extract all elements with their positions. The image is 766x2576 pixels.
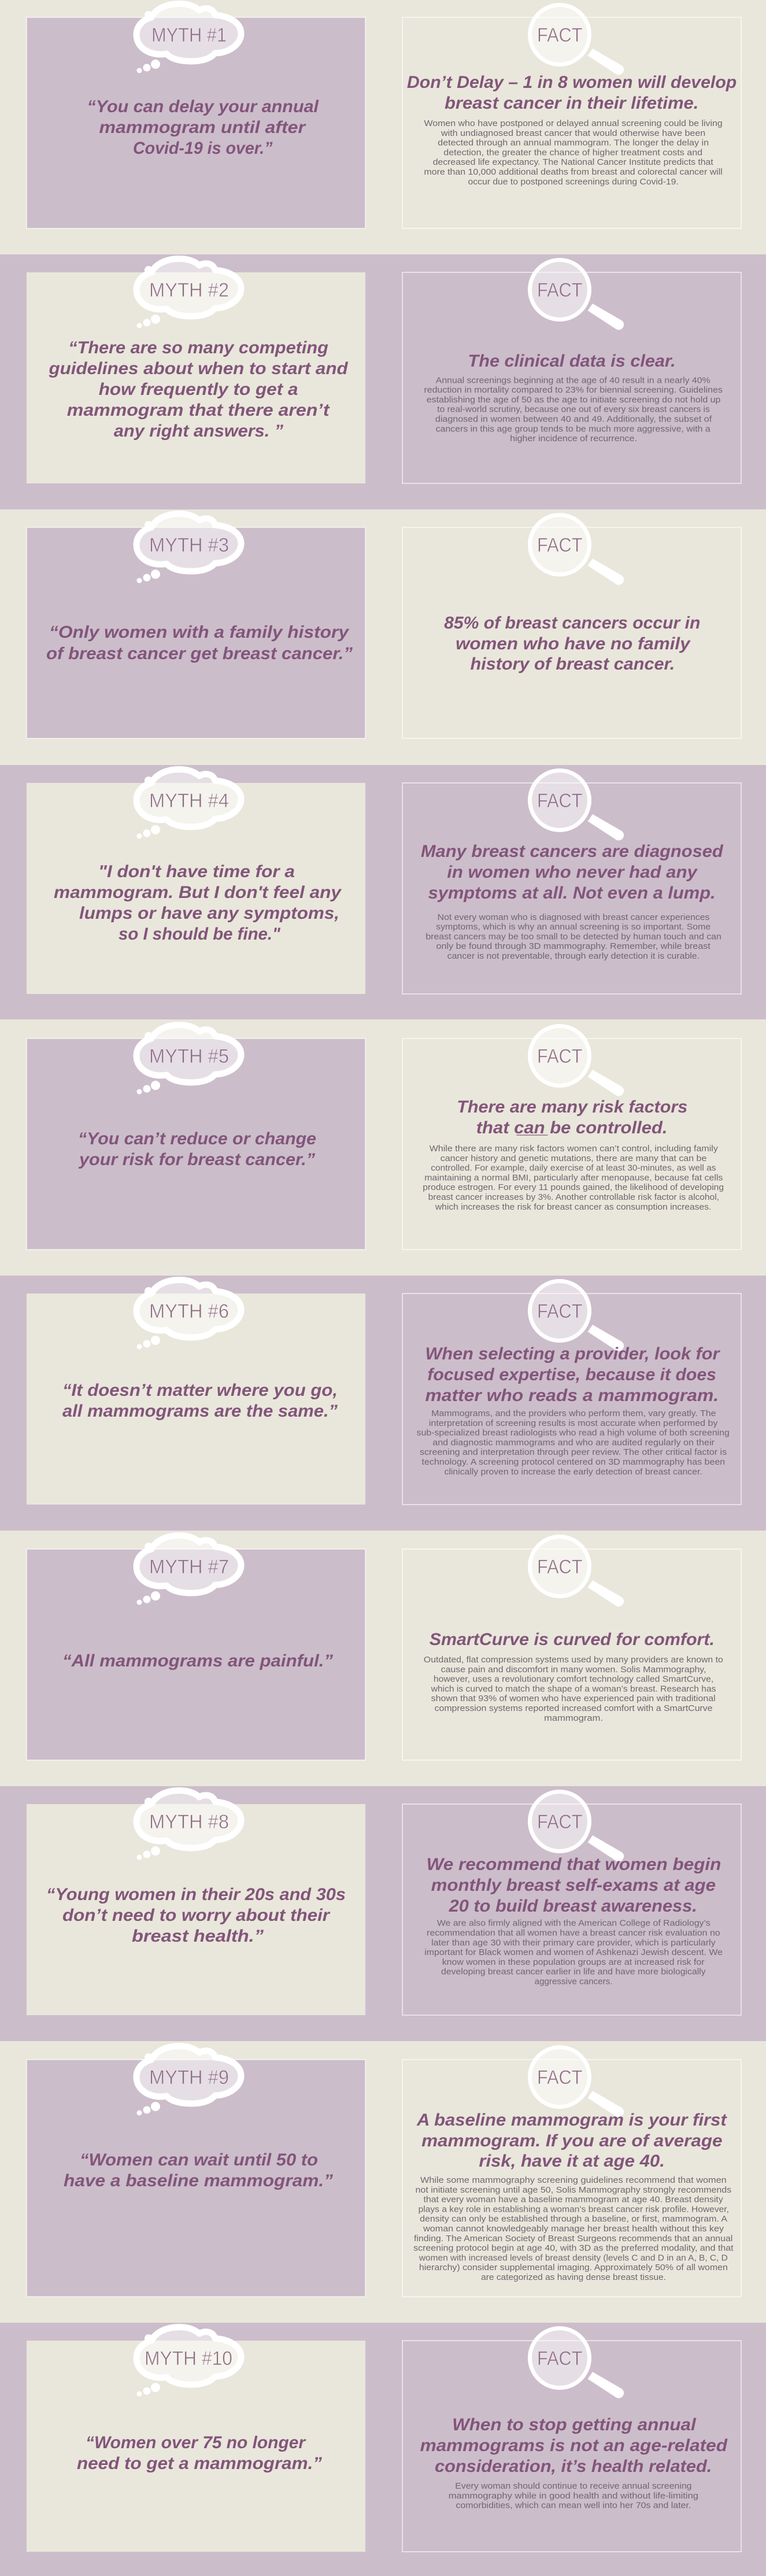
myth 6 quote: “It doesn’t matter where you go, xyxy=(62,1381,338,1400)
myth 5 quote: “You can’t reduce or change xyxy=(78,1129,316,1148)
fact 10 heading: consideration, it’s health related. xyxy=(435,2456,712,2476)
icon: magnifier 6 xyxy=(530,1281,624,1351)
icon: magnifier 2 xyxy=(530,260,624,330)
fact panel 9 xyxy=(402,2047,741,2297)
myth 8 label: MYTH #8 xyxy=(149,1811,229,1833)
fact 5 heading: that can be controlled. xyxy=(476,1118,668,1137)
fact 6 heading xyxy=(425,1344,721,1405)
myth 2 quote: guidelines about when to start and xyxy=(48,359,349,378)
fact 9 body: While some mammography screening guidelines recommend that women xyxy=(420,2176,727,2185)
fact 9 body xyxy=(413,2176,734,2282)
fact 4 heading xyxy=(421,841,724,903)
myth 8 quote: “Young women in their 20s and 30s xyxy=(46,1885,346,1904)
fact 7 label: FACT xyxy=(537,1556,583,1578)
myth 2 quote xyxy=(48,338,349,440)
fact 7 body xyxy=(424,1655,723,1723)
myth 4 quote: "I don't have time for a xyxy=(98,862,295,881)
myth 8 quote: breast health.” xyxy=(132,1927,264,1946)
myth 6 label: MYTH #6 xyxy=(149,1300,229,1322)
myth 5 quote xyxy=(78,1129,316,1169)
fact 10 body: Every woman should continue to receive annual screening xyxy=(455,2482,691,2491)
myth 1 quote xyxy=(87,97,319,158)
icon: thought cloud 8 xyxy=(136,1790,241,1860)
icon: thought cloud 6 xyxy=(136,1280,241,1350)
myth 9 quote: “Women can wait until 50 to xyxy=(80,2150,318,2170)
icon: thought cloud 2 xyxy=(136,259,241,328)
fact 8 label: FACT xyxy=(537,1811,583,1833)
fact 10 body xyxy=(449,2482,698,2511)
section 10 background xyxy=(0,2323,766,2576)
fact 5 body: breast cancer increases by 3%. Another controllable risk factor is alcohol, xyxy=(428,1193,719,1202)
myth panel 8 xyxy=(27,1790,365,2015)
fact 4 body: breast cancers may be too small to be detected by human touch and can xyxy=(425,933,721,941)
fact 1 heading xyxy=(407,72,737,112)
icon: magnifier 9 xyxy=(530,2047,624,2117)
myth 8 quote: don’t need to worry about their xyxy=(62,1906,331,1925)
fact 9 body: are categorized as having dense breast tissue. xyxy=(481,2273,666,2282)
myth 2 quote: any right answers. ” xyxy=(114,421,283,440)
myth 3 quote: “Only women with a family history xyxy=(49,623,349,642)
fact 2 body xyxy=(424,375,723,443)
fact 1 body: more than 10,000 additional deaths from breast and colorectal cancer will xyxy=(424,167,723,176)
icon: magnifier 8 xyxy=(530,1791,624,1861)
section 5 background xyxy=(0,1019,766,1276)
fact 5 body: controlled. For example, daily exercise of at least 30-minutes, as well as xyxy=(431,1164,716,1173)
fact 9 heading: A baseline mammogram is your first xyxy=(416,2110,728,2130)
fact 9 body: not initiate screening until age 50, Solis Mammography strongly recommends xyxy=(416,2186,732,2195)
myth 4 quote xyxy=(54,862,342,944)
icon: thought cloud 4 xyxy=(136,769,241,838)
fact 7 body: which is curved to match the shape of a woman’s breast. Research has xyxy=(430,1685,716,1694)
fact 6 body: clinically proven to increase the early detection of breast cancer. xyxy=(445,1468,702,1477)
fact 1 heading: breast cancer in their lifetime. xyxy=(445,93,698,112)
myth 8 quote xyxy=(46,1885,346,1946)
fact 3 heading xyxy=(444,613,700,674)
myth 1 label: MYTH #1 xyxy=(151,24,227,46)
fact 9 heading xyxy=(416,2110,728,2171)
fact 5 body: produce estrogen. For every 11 pounds gained, the likelihood of developing xyxy=(423,1183,724,1192)
fact 5 body: While there are many risk factors women can’t control, including family xyxy=(430,1144,718,1154)
myth panel 1 xyxy=(27,3,365,228)
fact 2 body: diagnosed in women between 40 and 49. Additionally, the subset of xyxy=(435,413,712,424)
fact 5 label: FACT xyxy=(537,1045,583,1067)
fact 8 body: know women in these population groups are at increased risk for xyxy=(442,1958,705,1967)
fact 9 label: FACT xyxy=(537,2067,583,2089)
fact 3 label: FACT xyxy=(537,534,583,556)
myth 1 quote: “You can delay your annual xyxy=(87,97,319,116)
fact 1 heading: Don’t Delay – 1 in 8 women will develop xyxy=(407,72,737,91)
fact 4 heading: in women who never had any xyxy=(447,862,698,882)
icon: thought cloud 9 xyxy=(136,2046,241,2115)
myth 5 quote: your risk for breast cancer.” xyxy=(78,1150,315,1169)
icon: thought cloud 7 xyxy=(136,1536,241,1605)
fact 10 heading xyxy=(420,2415,728,2476)
icon: magnifier 10 xyxy=(530,2328,624,2398)
myth 2 quote: “There are so many competing xyxy=(68,338,328,357)
fact 6 body: sub-specialized breast radiologists who read a high volume of both screening xyxy=(417,1429,730,1438)
fact 1 body: detection, the greater the chance of higher treatment costs and xyxy=(443,147,702,157)
fact 8 body: developing breast cancer earlier in life and have more biologically xyxy=(441,1968,706,1977)
fact 1 body: occur due to postponed screenings during Covid-19. xyxy=(468,176,679,186)
fact 9 heading: mammogram. If you are of average xyxy=(421,2131,723,2150)
fact 7 body: mammogram. xyxy=(544,1714,603,1723)
fact 3 heading: history of breast cancer. xyxy=(471,654,675,674)
section 9 background xyxy=(0,2041,766,2323)
myth 3 quote xyxy=(46,623,353,663)
myth 10 quote: “Women over 75 no longer xyxy=(86,2433,306,2452)
icon: thought cloud 10 xyxy=(136,2327,241,2396)
fact 9 body: finding. The American Society of Breast Surgeons recommends that an annual xyxy=(414,2234,732,2244)
fact 8 heading: 20 to build breast awareness. xyxy=(448,1896,697,1916)
myth 7 label: MYTH #7 xyxy=(149,1556,229,1578)
fact 6 heading: When selecting a provider, look for xyxy=(425,1344,721,1363)
fact 5 heading: There are many risk factors xyxy=(457,1097,688,1117)
section 4 background xyxy=(0,765,766,1019)
fact 6 body: and diagnostic mammograms and who are audited regularly on their xyxy=(432,1439,715,1447)
fact 6 label: FACT xyxy=(537,1300,583,1322)
fact 8 body: later than age 30 with their primary care provider, which is particularly xyxy=(431,1939,716,1947)
fact 7 heading: SmartCurve is curved for comfort. xyxy=(430,1629,715,1649)
fact 5 body: cancer history and genetic mutations, there are many that can be xyxy=(441,1154,706,1163)
fact 8 body: aggressive cancers. xyxy=(535,1978,613,1986)
fact 6 body: interpretation of screening results is most accurate when performed by xyxy=(429,1419,718,1428)
section 7 background xyxy=(0,1531,766,1786)
fact 6 body: screening and interpretation through peer review. The other critical factor is xyxy=(420,1448,727,1457)
fact 2 label: FACT xyxy=(537,279,583,301)
fact 7 body: shown that 93% of women who have experienced pain with traditional xyxy=(431,1694,716,1703)
fact 1 body xyxy=(424,118,723,186)
icon: magnifier 7 xyxy=(530,1537,624,1606)
myth 6 quote xyxy=(62,1381,338,1421)
fact 2 body: establishing the age of 50 as the age to initiate screening do not hold up xyxy=(427,394,721,404)
fact 4 body: Not every woman who is diagnosed with breast cancer experiences xyxy=(438,913,710,922)
fact 9 body: plays a key role in establishing a woman’s breast cancer risk profile. However, xyxy=(419,2205,729,2214)
myth 5 label: MYTH #5 xyxy=(149,1045,229,1067)
icon: thought cloud 5 xyxy=(136,1025,241,1094)
fact 9 body: hierarchy) consider supplemental imaging. Approximately 50% of all women xyxy=(419,2263,728,2272)
myth 10 quote xyxy=(77,2433,322,2473)
fact 9 body: that every woman have a baseline mammogram at age 40. Breast density xyxy=(424,2196,723,2205)
myth 6 quote: all mammograms are the same.” xyxy=(62,1402,338,1421)
fact 5 body: which increases the risk for breast cancer as consumption increases. xyxy=(435,1203,711,1212)
myth 7 quote: “All mammograms are painful.” xyxy=(62,1651,333,1670)
fact 9 body: women with increased levels of breast density (levels C and D in an A, B, C, D xyxy=(419,2254,728,2263)
myth 4 quote: so I should be fine." xyxy=(119,925,281,944)
fact 10 label: FACT xyxy=(537,2348,583,2370)
myth panel 10 xyxy=(27,2327,365,2552)
fact 10 body: comorbidities, which can mean well into her 70s and later. xyxy=(456,2501,691,2511)
fact 8 heading xyxy=(427,1854,721,1916)
myth 10 quote: need to get a mammogram.” xyxy=(77,2454,322,2473)
myth panel 4 xyxy=(27,769,365,994)
myth 9 quote xyxy=(64,2150,333,2190)
fact 8 body: important for Black women and women of Ashkenazi Jewish descent. We xyxy=(424,1948,723,1957)
fact 8 heading: We recommend that women begin xyxy=(427,1854,721,1874)
myth 3 quote: of breast cancer get breast cancer.” xyxy=(46,644,353,663)
fact 8 body: recommendation that all women have a breast cancer risk evaluation no xyxy=(427,1929,720,1938)
myth 9 quote: have a baseline mammogram.” xyxy=(64,2171,333,2190)
myth panel 3 xyxy=(27,513,365,738)
myth 9 label: MYTH #9 xyxy=(149,2067,229,2089)
fact 10 heading: mammograms is not an age-related xyxy=(420,2435,728,2455)
icon: magnifier 4 xyxy=(530,770,624,840)
icon: magnifier 3 xyxy=(530,515,624,585)
fact 4 body: cancer is not preventable, through early detection it is curable. xyxy=(447,952,700,961)
fact panel 7 xyxy=(402,1537,741,1760)
fact 5 heading xyxy=(457,1097,688,1137)
myth 2 label: MYTH #2 xyxy=(149,279,229,301)
fact 8 body xyxy=(424,1919,723,1986)
icon: thought cloud 1 xyxy=(136,3,241,73)
fact 1 body: with undiagnosed breast cancer that would otherwise have been xyxy=(441,128,705,138)
fact panel 4 xyxy=(402,770,741,994)
myth 4 quote: lumps or have any symptoms, xyxy=(79,904,339,923)
fact 2 body: to real-world scrutiny, because one out of every six breast cancers is xyxy=(437,404,710,414)
fact 9 body: density can only be established through a baseline, or first, mammogram. A xyxy=(420,2215,727,2224)
fact 9 body: woman cannot knowledgeably manage her breast health without this key xyxy=(423,2224,724,2234)
section 3 background xyxy=(0,509,766,765)
myth panel 2 xyxy=(27,259,365,483)
myth 10 label: MYTH #10 xyxy=(145,2348,232,2370)
fact 1 label: FACT xyxy=(537,24,583,46)
fact 9 heading: risk, have it at age 40. xyxy=(479,2151,665,2171)
fact 2 body: Annual screenings beginning at the age of 40 result in a nearly 40% xyxy=(436,375,711,385)
fact 9 body: screening protocol begin at age 40, with 3D as the preferred modality, and that xyxy=(413,2244,734,2253)
fact 6 body: Mammograms, and the providers who perform them, vary greatly. The xyxy=(431,1409,716,1418)
fact 4 body: symptoms, which is why an annual screening is so important. Some xyxy=(436,923,711,932)
myth 4 label: MYTH #4 xyxy=(149,790,229,812)
myth 1 quote: Covid-19 is over.” xyxy=(133,139,273,158)
fact 2 body: higher incidence of recurrence. xyxy=(510,433,637,443)
fact panel 5 xyxy=(402,1026,741,1250)
fact 7 body: Outdated, flat compression systems used by many providers are known to xyxy=(424,1655,723,1665)
fact panel 8 xyxy=(402,1791,741,2015)
section 1 background xyxy=(0,0,766,254)
fact 3 heading: 85% of breast cancers occur in xyxy=(444,613,700,633)
fact panel 1 xyxy=(402,5,741,228)
myth 2 quote: mammogram that there aren’t xyxy=(67,400,331,419)
myth panel 7 xyxy=(27,1536,365,1760)
icon: magnifier 1 xyxy=(530,5,624,75)
myth panel 9 xyxy=(27,2046,365,2297)
fact 1 body: decreased life expectancy. The National Cancer Institute predicts that xyxy=(433,157,713,167)
fact 1 body: Women who have postponed or delayed annual screening could be living xyxy=(424,118,723,128)
fact 6 heading: matter who reads a mammogram. xyxy=(425,1385,719,1405)
fact 6 body: technology. A screening protocol centered on 3D mammography has been xyxy=(422,1458,725,1467)
myth panel 5 xyxy=(27,1025,365,1250)
fact 4 body xyxy=(425,913,721,961)
fact panel 6 xyxy=(402,1281,741,1505)
icon: thought cloud 3 xyxy=(136,513,241,583)
myth 4 quote: mammogram. But I don't feel any xyxy=(54,883,342,902)
fact 6 heading: focused expertise, because it does xyxy=(427,1365,716,1384)
section 6 background xyxy=(0,1276,766,1531)
fact 10 heading: When to stop getting annual xyxy=(452,2415,697,2434)
fact 2 body: cancers in this age group tends to be much more aggressive, with a xyxy=(436,423,711,434)
fact 7 body: however, uses a revolutionary comfort technology called SmartCurve, xyxy=(434,1675,713,1684)
fact 10 body: mammography while in good health and without life-limiting xyxy=(449,2492,698,2501)
fact 7 body: cause pain and discomfort in many women. Solis Mammography, xyxy=(441,1665,706,1675)
fact 7 body: compression systems reported increased comfort with a SmartCurve xyxy=(435,1704,713,1713)
fact panel 3 xyxy=(402,515,741,738)
fact panel 10 xyxy=(402,2328,741,2552)
fact 8 heading: monthly breast self-exams at age xyxy=(431,1875,716,1895)
fact 5 body xyxy=(423,1144,724,1212)
fact 6 body xyxy=(417,1409,730,1477)
fact 2 body: reduction in mortality compared to 23% for biennial screening. Guidelines xyxy=(424,385,723,394)
fact 4 heading: Many breast cancers are diagnosed xyxy=(421,841,724,861)
icon: magnifier 5 xyxy=(530,1026,624,1096)
fact 1 body: detected through an annual mammogram. The longer the delay in xyxy=(438,138,709,147)
fact 4 label: FACT xyxy=(537,790,583,812)
myth 2 quote: how frequently to get a xyxy=(99,379,298,398)
fact 3 heading: women who have no family xyxy=(456,634,691,653)
fact 4 heading: symptoms at all. Not even a lump. xyxy=(428,883,716,903)
section 2 background xyxy=(0,254,766,509)
myth panel 6 xyxy=(27,1280,365,1505)
fact 8 body: We are also firmly aligned with the American College of Radiology’s xyxy=(437,1919,711,1928)
fact panel 2 xyxy=(402,260,741,483)
myth 3 label: MYTH #3 xyxy=(149,534,229,556)
fact 2 heading: The clinical data is clear. xyxy=(468,351,676,370)
section 8 background xyxy=(0,1786,766,2041)
fact 5 body: maintaining a normal BMI, particularly after menopause, because fat cells xyxy=(424,1174,723,1182)
myth 1 quote: mammogram until after xyxy=(99,118,306,137)
fact 4 body: only be found through 3D mammography. Remember, while breast xyxy=(436,942,711,951)
